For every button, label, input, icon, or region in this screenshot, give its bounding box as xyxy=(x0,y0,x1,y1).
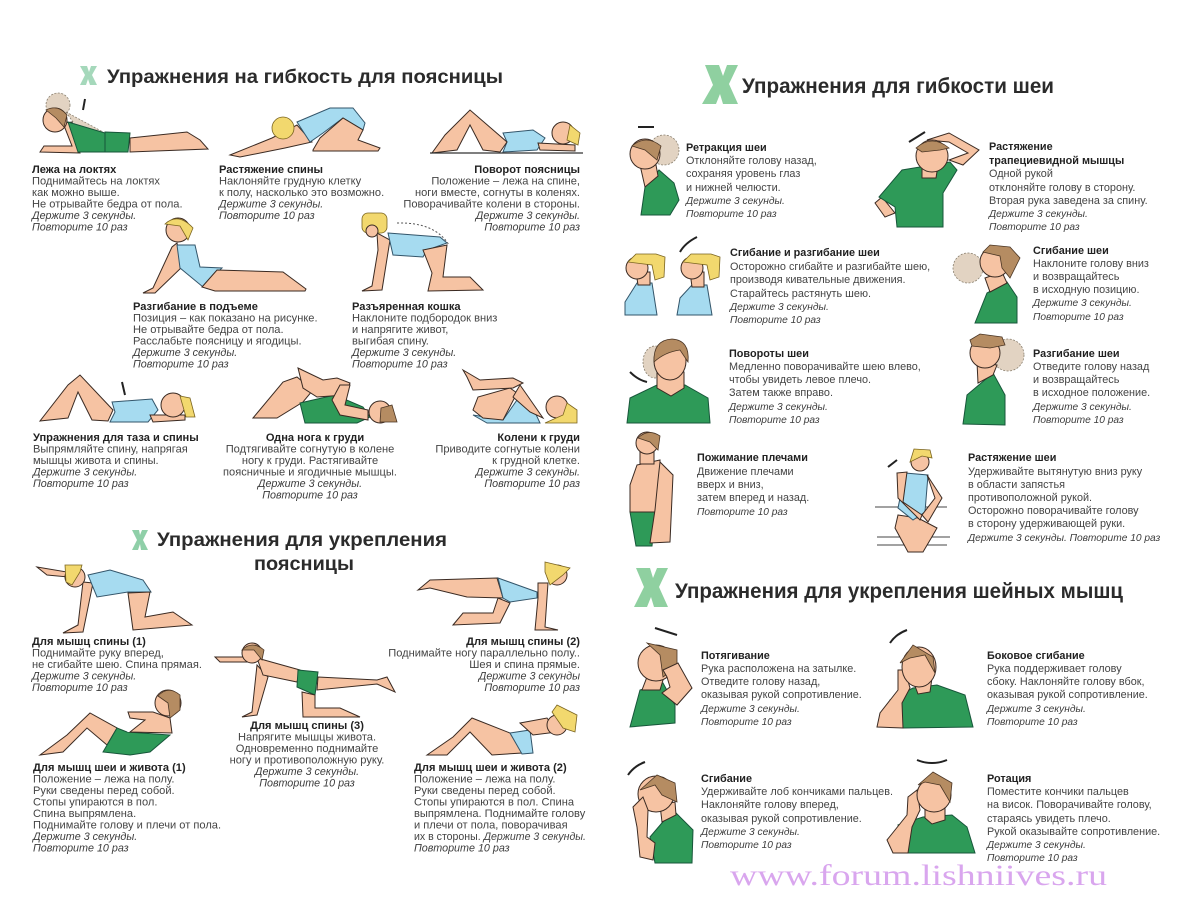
illustration: neck retraction xyxy=(630,127,679,215)
illustration: forward flexion xyxy=(628,762,693,863)
text: neck and abs 2: Повторите 10 раз xyxy=(414,842,510,854)
illustration: rotation xyxy=(887,760,975,853)
text: neck extension: Разгибание шеи xyxy=(1033,348,1120,360)
text: back muscles 2: Поднимайте ногу параллельно полу.. xyxy=(388,648,580,660)
illustration: back muscles 2 xyxy=(418,562,570,630)
text: back muscles 1: Держите 3 секунды. xyxy=(31,670,136,682)
text: angry cat: и напрягите живот, xyxy=(352,324,448,336)
watermark: www.forum.lishniives.ru xyxy=(730,859,1107,892)
text: forward flexion: Удерживайте лоб кончиками пальцев. xyxy=(701,786,893,798)
text: side flexion xyxy=(986,650,1148,728)
text: trapezius stretch: Повторите 10 раз xyxy=(989,222,1080,233)
illustration: back stretch xyxy=(230,108,380,157)
text: pull back xyxy=(700,650,862,728)
text: lumbar rotation: Положение – лежа на спине, xyxy=(431,176,580,188)
text: side flexion: Боковое сгибание xyxy=(987,650,1085,662)
illustration: lying on elbows xyxy=(40,93,208,153)
text: side flexion: Повторите 10 раз xyxy=(987,717,1078,728)
text: lying on elbows: Лежа на локтях xyxy=(32,164,117,176)
text: neck and abs 1: Держите 3 секунды. xyxy=(32,831,137,843)
text: shoulder shrug: Повторите 10 раз xyxy=(697,507,788,518)
text: pull back: Рука расположена на затылке. xyxy=(701,663,856,675)
text: one leg to chest: Одна нога к груди xyxy=(266,432,364,444)
text: rotation: Ротация xyxy=(987,773,1031,785)
text: back stretch: Наклоняйте грудную клетку xyxy=(219,176,362,188)
text: cobra extension: Расслабьте поясницу и ягодицы. xyxy=(133,336,302,348)
text: cobra extension: Не отрывайте бедра от пола. xyxy=(133,324,284,336)
text: neck stretch: противоположной рукой. xyxy=(968,492,1092,504)
text: forward flexion xyxy=(700,773,893,851)
text: side flexion: Рука поддерживает голову xyxy=(987,663,1122,675)
text: back muscles 1 xyxy=(31,636,202,694)
text: lumbar rotation: Держите 3 секунды. xyxy=(475,210,580,222)
text: trapezius stretch: Держите 3 секунды. xyxy=(988,209,1088,220)
text: back muscles 2 xyxy=(388,636,580,694)
text: lumbar rotation: ноги вместе, согнуты в коленях. xyxy=(415,187,580,199)
heading: lumbar flexibility: Упражнения на гибкость для поясницы xyxy=(107,66,503,88)
text: neck flexion: и возвращайтесь xyxy=(1033,271,1120,283)
text: back muscles 3: Повторите 10 раз xyxy=(259,778,355,790)
panel: neck strengthening xyxy=(628,568,1160,864)
text: one leg to chest xyxy=(223,432,397,502)
illustration: side flexion xyxy=(877,630,973,728)
illustration: angry cat xyxy=(362,213,483,291)
text: one leg to chest: Подтягивайте согнутую в колене xyxy=(226,444,394,456)
text: neck flexion: Повторите 10 раз xyxy=(1033,312,1124,323)
text: angry cat: Наклоните подбородок вниз xyxy=(352,312,497,324)
text: neck flexion xyxy=(1032,245,1149,323)
text: neck flexion: Наклоните голову вниз xyxy=(1033,258,1149,270)
text: neck flexion and extension: Повторите 10 раз xyxy=(730,315,821,326)
text: pelvis and back: Упражнения для таза и спины xyxy=(33,432,199,444)
text: trapezius stretch xyxy=(988,141,1148,233)
text: pull back: Держите 3 секунды. xyxy=(700,704,800,715)
text: neck and abs 2: Для мышц шеи и живота (2) xyxy=(414,762,567,774)
text: neck extension: Держите 3 секунды. xyxy=(1032,402,1132,413)
panel: lumbar flexibility xyxy=(31,66,583,502)
text: lying on elbows: Не отрывайте бедра от пола. xyxy=(32,198,183,210)
text: pull back: Повторите 10 раз xyxy=(701,717,792,728)
illustration: trapezius stretch xyxy=(875,132,979,227)
text: neck retraction: Держите 3 секунды. xyxy=(685,196,785,207)
text: neck stretch: Держите 3 секунды. Повторите 10 раз xyxy=(967,533,1160,544)
text: neck extension: и возвращайтесь xyxy=(1033,374,1120,386)
text: pelvis and back: мышцы живота и спины. xyxy=(33,455,159,467)
text: rotation xyxy=(986,773,1160,864)
text: knees to chest: Колени к груди xyxy=(497,432,580,444)
text: knees to chest xyxy=(435,432,580,490)
text: back stretch xyxy=(218,164,384,222)
text: back muscles 3: ногу и противоположную руку. xyxy=(230,754,384,766)
text: angry cat: Разъяренная кошка xyxy=(352,301,461,313)
text: neck flexion and extension: Сгибание и разгибание шеи xyxy=(730,247,880,259)
text: rotation: Рукой оказывайте сопротивление. xyxy=(987,826,1160,838)
text: back muscles 2: Повторите 10 раз xyxy=(484,682,580,694)
illustration: shoulder shrug xyxy=(630,432,673,546)
text: knees to chest: Приводите согнутые колени xyxy=(435,444,580,456)
illustration: neck and abs 2 xyxy=(427,705,577,755)
text: angry cat: Повторите 10 раз xyxy=(352,358,448,370)
heading: neck flexibility: Упражнения для гибкости шеи xyxy=(742,75,1054,98)
text: side flexion: оказывая рукой сопротивление. xyxy=(987,689,1148,701)
text: neck and abs 1: Спина выпрямлена. xyxy=(33,808,136,820)
heading: lumbar strengthening: поясницы xyxy=(254,553,354,575)
text: neck retraction: Ретракция шеи xyxy=(686,142,767,154)
heading: neck strengthening: Упражнения для укрепления шейных мышц xyxy=(675,580,1123,603)
text: cobra extension: Повторите 10 раз xyxy=(133,358,229,370)
text: pelvis and back: Повторите 10 раз xyxy=(33,478,129,490)
text: neck rotation: Повороты шеи xyxy=(729,348,809,360)
text: neck and abs 2 xyxy=(414,762,586,854)
text: neck flexion: в исходную позицию. xyxy=(1033,284,1139,296)
text: trapezius stretch: Растяжение xyxy=(989,141,1053,153)
text: back muscles 3 xyxy=(230,720,384,790)
text: pelvis and back xyxy=(32,432,199,490)
illustration: pelvis and back xyxy=(40,375,195,422)
text: side flexion: сбоку. Наклоняйте голову вбок, xyxy=(987,676,1144,688)
text: shoulder shrug: Пожимание плечами xyxy=(697,452,808,464)
illustration: cobra extension xyxy=(143,218,306,293)
heading: neck flexibility xyxy=(702,65,1054,104)
panel: neck flexibility xyxy=(625,65,1160,552)
text: neck stretch: в сторону удерживающей руки. xyxy=(968,518,1125,530)
text: one leg to chest: Повторите 10 раз xyxy=(262,490,358,502)
text: pelvis and back: Держите 3 секунды. xyxy=(32,466,137,478)
text: back muscles 3: Одновременно поднимайте xyxy=(236,743,378,755)
text: one leg to chest: поясничные и ягодичные мышцы. xyxy=(223,466,397,478)
text: neck and abs 2: Стопы упираются в пол. Спина xyxy=(414,796,575,808)
text: neck and abs 1: Руки сведены перед собой. xyxy=(33,785,175,797)
text: knees to chest: к грудной клетке. xyxy=(492,455,580,467)
text: knees to chest: Повторите 10 раз xyxy=(484,478,580,490)
text: neck stretch: Осторожно поворачивайте голову xyxy=(968,505,1139,517)
text: side flexion: Держите 3 секунды. xyxy=(986,704,1086,715)
text: neck flexion and extension: Старайтесь растянуть шею. xyxy=(730,288,871,300)
heading: neck strengthening xyxy=(634,568,1123,607)
text: pull back: Потягивание xyxy=(701,650,770,662)
text: lying on elbows: Повторите 10 раз xyxy=(32,222,128,234)
text: neck rotation: чтобы увидеть левое плечо. xyxy=(729,374,871,386)
illustration: neck rotation xyxy=(627,339,710,423)
text: lying on elbows xyxy=(31,164,183,234)
text: neck extension: Повторите 10 раз xyxy=(1033,415,1124,426)
text: trapezius stretch: отклоняйте голову в сторону. xyxy=(989,182,1135,194)
text: angry cat: Держите 3 секунды. xyxy=(351,347,456,359)
text: angry cat: выгибая спину. xyxy=(352,336,429,348)
text: neck and abs 1 xyxy=(32,762,221,854)
text: trapezius stretch: Одной рукой xyxy=(989,168,1053,180)
text: neck retraction: Отклоняйте голову назад, xyxy=(686,155,817,167)
text: neck retraction: Повторите 10 раз xyxy=(686,209,777,220)
text: back muscles 1: Для мышц спины (1) xyxy=(32,636,146,648)
text: neck rotation: Держите 3 секунды. xyxy=(728,402,828,413)
text: forward flexion: Держите 3 секунды. xyxy=(700,827,800,838)
text: lying on elbows: как можно выше. xyxy=(32,187,120,199)
text: back muscles 3: Держите 3 секунды. xyxy=(254,766,359,778)
text: lumbar rotation xyxy=(403,164,580,234)
illustration: neck flexion and extension xyxy=(625,237,720,315)
text: neck stretch xyxy=(967,452,1160,544)
text: trapezius stretch: трапециевидной мышцы xyxy=(989,155,1124,167)
text: lumbar rotation: Поворачивайте колени в стороны. xyxy=(403,198,580,210)
text: rotation: на висок. Поворачивайте голову, xyxy=(987,799,1152,811)
text: forward flexion: оказывая рукой сопротивление. xyxy=(701,813,862,825)
text: one leg to chest: ногу к груди. Растягивайте xyxy=(242,455,378,467)
text: back muscles 1: не сгибайте шею. Спина прямая. xyxy=(32,659,202,671)
text: neck flexion: Сгибание шеи xyxy=(1033,245,1109,257)
text: back muscles 2: Держите 3 секунды xyxy=(478,670,580,682)
panel: lumbar strengthening xyxy=(31,529,586,854)
text: neck and abs 2: Положение – лежа на полу. xyxy=(414,774,555,786)
text: back stretch: к полу, насколько это возможно. xyxy=(219,187,384,199)
heading: lumbar strengthening xyxy=(132,529,447,575)
text: shoulder shrug: затем вперед и назад. xyxy=(697,492,809,504)
text: one leg to chest: Держите 3 секунды. xyxy=(257,478,362,490)
text: back muscles 2: Шея и спина прямые. xyxy=(469,659,580,671)
text: lumbar rotation: Повторите 10 раз xyxy=(484,222,580,234)
text: cobra extension: Позиция – как показано на рисунке. xyxy=(133,312,318,324)
text: rotation: Держите 3 секунды. xyxy=(986,840,1086,851)
text: rotation: стараясь увидеть плечо. xyxy=(987,813,1111,825)
text: neck and abs 1: Для мышц шеи и живота (1) xyxy=(33,762,186,774)
illustration: back muscles 1 xyxy=(37,565,192,633)
text: neck stretch: в области запястья xyxy=(968,479,1065,491)
text: neck rotation: Медленно поворачивайте шею влево, xyxy=(729,361,921,373)
text: forward flexion: Наклоняйте голову вперед, xyxy=(701,799,839,811)
text: neck extension: Отведите голову назад xyxy=(1033,361,1150,373)
text: neck and abs 1: Положение – лежа на полу. xyxy=(33,774,174,786)
text: neck extension: в исходное положение. xyxy=(1033,387,1150,399)
text: lumbar rotation: Поворот поясницы xyxy=(474,164,580,176)
illustration: neck and abs 1 xyxy=(40,690,181,755)
text: neck extension xyxy=(1032,348,1150,426)
illustration: neck stretch xyxy=(875,449,950,552)
text: back muscles 2: Для мышц спины (2) xyxy=(466,636,580,648)
text: neck and abs 2: Руки сведены перед собой. xyxy=(414,785,556,797)
text: forward flexion: Сгибание xyxy=(701,773,752,785)
text: neck and abs 1: Повторите 10 раз xyxy=(33,842,129,854)
text: back muscles 3: Напрягите мышцы живота. xyxy=(238,732,376,744)
text: lying on elbows: Поднимайтесь на локтях xyxy=(32,176,160,188)
illustration: neck extension xyxy=(963,334,1024,425)
text: back muscles 3: Для мышц спины (3) xyxy=(250,720,364,732)
text: shoulder shrug: вверх и вниз, xyxy=(697,479,764,491)
text: neck stretch: Удерживайте вытянутую вниз руку xyxy=(968,466,1143,478)
text: neck retraction xyxy=(685,142,817,220)
text: pull back: Отведите голову назад, xyxy=(701,676,820,688)
text: back muscles 1: Повторите 10 раз xyxy=(32,682,128,694)
illustration: knees to chest xyxy=(463,370,577,423)
heading: lumbar strengthening: Упражнения для укрепления xyxy=(157,529,447,551)
text: shoulder shrug xyxy=(697,452,809,518)
text: neck and abs 1: Поднимайте голову и плечи от пола. xyxy=(33,820,221,832)
text: neck stretch: Растяжение шеи xyxy=(968,452,1056,464)
text: neck and abs 2: и плечи от пола, поворачивая xyxy=(414,820,568,832)
text: cobra extension: Держите 3 секунды. xyxy=(132,347,237,359)
text: neck retraction: и нижней челюсти. xyxy=(686,182,781,194)
text: shoulder shrug: Движение плечами xyxy=(697,466,794,478)
text: pull back: оказывая рукой сопротивление. xyxy=(701,689,862,701)
text: neck flexion and extension: Держите 3 секунды. xyxy=(729,302,829,313)
text: back stretch: Растяжение спины xyxy=(219,164,323,176)
text: neck and abs 2: их в стороны. Держите 3 секунды. xyxy=(414,831,586,843)
text: neck and abs 2: выпрямлена. Поднимайте голову xyxy=(414,808,586,820)
illustration: back muscles 3 xyxy=(215,643,395,717)
text: neck rotation: Затем также вправо. xyxy=(729,387,833,399)
text: trapezius stretch: Вторая рука заведена за спину. xyxy=(989,195,1148,207)
illustration: pull back xyxy=(630,628,692,727)
text: cobra extension xyxy=(132,301,318,370)
text: neck flexion: Держите 3 секунды. xyxy=(1032,298,1132,309)
text: back muscles 1: Поднимайте руку вперед, xyxy=(32,648,164,660)
text: neck retraction: сохраняя уровень глаз xyxy=(686,168,800,180)
text: neck rotation: Повторите 10 раз xyxy=(729,415,820,426)
text: cobra extension: Разгибание в подъеме xyxy=(133,301,258,313)
text: neck flexion and extension: Осторожно сгибайте и разгибайте шею, xyxy=(730,261,930,273)
text: neck rotation xyxy=(728,348,921,426)
text: neck and abs 1: Стопы упираются в пол. xyxy=(33,796,157,808)
text: pelvis and back: Выпрямляйте спину, напрягая xyxy=(33,444,188,456)
text: rotation: Поместите кончики пальцев xyxy=(987,786,1129,798)
illustration: lumbar rotation xyxy=(430,110,583,153)
text: forward flexion: Повторите 10 раз xyxy=(701,840,792,851)
illustration: neck flexion xyxy=(953,245,1020,323)
text: knees to chest: Держите 3 секунды. xyxy=(475,466,580,478)
text: rotation: Повторите 10 раз xyxy=(987,853,1078,864)
text: neck flexion and extension: производя кивательные движения. xyxy=(730,274,906,286)
illustration: one leg to chest xyxy=(253,368,397,423)
text: back stretch: Повторите 10 раз xyxy=(219,210,315,222)
text: lying on elbows: Держите 3 секунды. xyxy=(31,210,136,222)
text: neck flexion and extension xyxy=(729,247,930,326)
text: angry cat xyxy=(351,301,497,370)
text: back stretch: Держите 3 секунды. xyxy=(218,198,323,210)
